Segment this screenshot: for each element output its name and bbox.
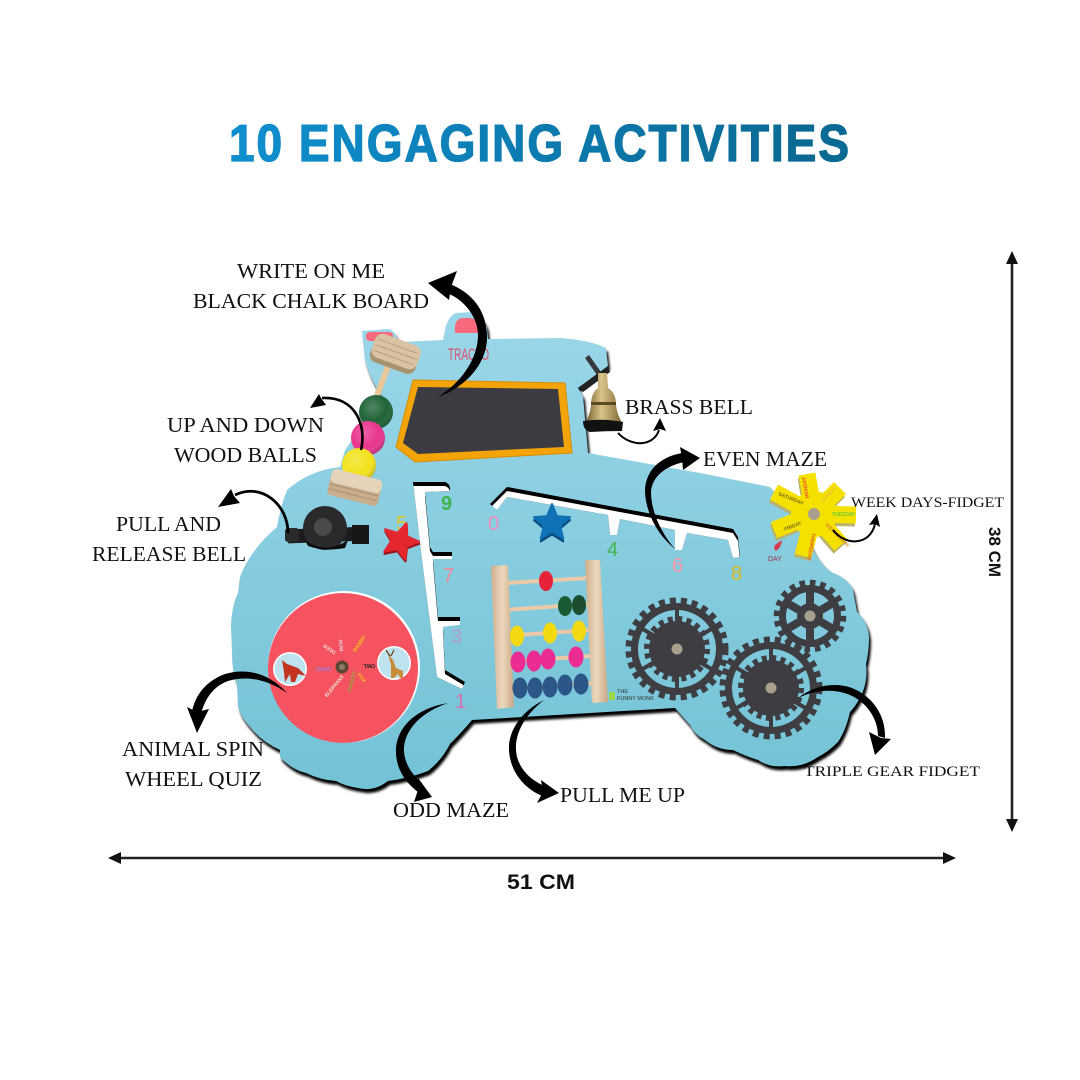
gear right	[722, 640, 820, 736]
gear small	[776, 582, 844, 650]
height dimension arrow	[1006, 251, 1018, 832]
maze numbers: 5	[396, 513, 407, 535]
label: animal spin wheel quiz	[122, 737, 264, 791]
brass bell	[578, 355, 623, 432]
board body	[231, 312, 869, 789]
week days fidget: SUNDAY	[820, 484, 839, 504]
even maze slot	[490, 487, 740, 558]
title: 10 ENGAGING ACTIVITIES	[229, 116, 849, 173]
width dimension label: 51 CM	[507, 871, 575, 894]
odd maze slot	[413, 482, 465, 689]
arrow: to triple gear	[798, 685, 891, 755]
wheel animal names: FOX	[356, 672, 367, 685]
label: up and down wood balls	[167, 413, 324, 467]
wheel animal names: DEER	[322, 642, 337, 655]
maze numbers: 6	[672, 555, 683, 577]
arrow: to even maze	[645, 447, 700, 549]
label: triple gear fidget: TRIPLE GEAR FIDGET	[804, 764, 980, 780]
week days fidget	[773, 474, 856, 561]
infographic canvas	[92, 124, 1018, 889]
week days fidget: THURSDAY	[805, 533, 816, 561]
wheel window: deer	[377, 646, 411, 680]
cab markings	[366, 318, 489, 364]
day marker	[768, 540, 782, 563]
wheel animal names: OWL	[363, 662, 375, 668]
wheel animal names	[315, 635, 375, 699]
label: animal spin wheel quiz: ANIMAL SPIN	[122, 737, 264, 761]
label: even maze: EVEN MAZE	[703, 447, 827, 471]
arrow: to odd maze	[396, 703, 448, 802]
wheel animal names: HIPPO	[315, 665, 331, 671]
wheel animal names: RABBIT	[352, 635, 368, 654]
panel: tractor board	[231, 312, 871, 793]
maze numbers: 9	[441, 493, 452, 515]
arrow: to brass bell	[618, 418, 666, 443]
wheel animal names: ELEPHANT	[324, 674, 346, 699]
wheel window: fox	[273, 652, 307, 686]
arrow: to pull me up	[509, 700, 559, 803]
abacus	[491, 560, 608, 709]
width dimension arrow	[108, 852, 956, 864]
animal spin wheel	[268, 591, 420, 743]
arrow: to spin wheel	[187, 671, 287, 733]
triple gears	[628, 582, 844, 736]
cab markings: TRACTO	[448, 345, 489, 364]
arrow: to week days fidget	[833, 514, 880, 541]
up and down wood balls	[326, 332, 423, 507]
week days fidget: SATURDAY	[777, 491, 805, 507]
arrow: to chalk board	[428, 271, 487, 397]
maze numbers: 1	[455, 691, 466, 713]
label: pull and release bell	[92, 512, 246, 566]
week days fidget: TUESDAY	[832, 512, 856, 518]
label: pull me up: PULL ME UP	[560, 783, 685, 807]
brand logo	[609, 689, 654, 702]
brand logo: FUNNY MONK	[617, 696, 654, 702]
arrow: to wood balls	[310, 394, 362, 450]
maze numbers: 0	[488, 513, 499, 535]
maze numbers	[396, 493, 742, 713]
week days fidget: WEDNESDAY	[824, 522, 851, 550]
label: animal spin wheel quiz: WHEEL QUIZ	[125, 767, 262, 791]
label: week days fidget: WEEK DAYS-FIDGET	[851, 495, 1004, 511]
label: write on me: WRITE ON ME	[237, 259, 385, 283]
week days fidget: FRIDAY	[784, 520, 803, 533]
label: write on me	[193, 259, 429, 313]
wheel animal names: DONKEY	[347, 670, 358, 692]
label: up and down wood balls: UP AND DOWN	[167, 413, 324, 437]
label: brass bell: BRASS BELL	[625, 395, 753, 419]
board shadow	[233, 316, 871, 793]
brand logo: THE	[617, 689, 628, 695]
blue star	[534, 504, 570, 541]
maze numbers: 4	[607, 539, 618, 561]
week days fidget: MONDAY	[801, 476, 811, 499]
chalk board	[396, 380, 572, 462]
label: odd maze: ODD MAZE	[393, 798, 509, 822]
maze numbers: 3	[451, 626, 462, 648]
label: pull and release bell: RELEASE BELL	[92, 542, 246, 566]
maze numbers: 8	[731, 563, 742, 585]
pull and release bell	[285, 506, 369, 550]
maze numbers: 7	[443, 565, 454, 587]
wheel animal names: MON	[338, 639, 345, 651]
red star	[377, 517, 424, 564]
label: up and down wood balls: WOOD BALLS	[174, 443, 317, 467]
day marker: DAY	[768, 556, 782, 563]
label: pull and release bell: PULL AND	[116, 512, 221, 536]
arrow: to pull bell	[218, 489, 288, 533]
height dimension label: 38 CM	[985, 527, 1004, 577]
gear left	[628, 600, 726, 698]
label: write on me: BLACK CHALK BOARD	[193, 289, 429, 313]
